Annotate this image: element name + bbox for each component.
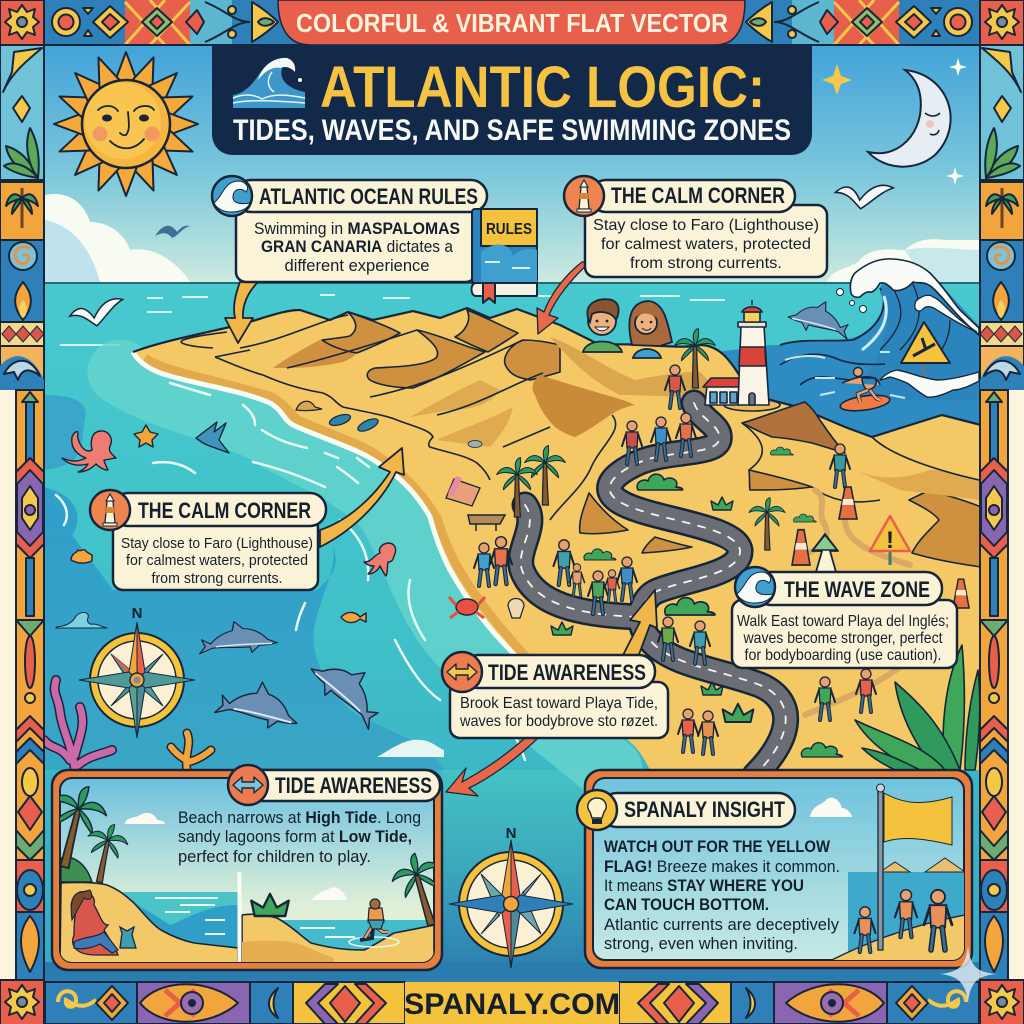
clouds: [45, 194, 981, 282]
dolphins: [200, 622, 394, 738]
title block: [212, 45, 812, 155]
icon: rules book: [472, 209, 537, 303]
title block: ATLANTIC LOGIC:: [320, 55, 765, 120]
callout: the calm corner (left): [90, 490, 326, 590]
cones and caution sign: [792, 487, 969, 608]
arrow: gold to shore from calm corner: [320, 448, 404, 547]
dune ridge lines: [181, 315, 979, 520]
octopus left: [62, 431, 116, 472]
coral: [44, 680, 211, 770]
land: sand dunes: [133, 308, 981, 770]
panel: tide awareness: perfect for children to play.: [178, 847, 371, 866]
dune shadows: [273, 310, 981, 567]
callout: atlantic ocean rules: GRAN CANARIA dictates a: [261, 237, 453, 256]
cones and caution sign: !: [886, 527, 894, 554]
arrow: gold to beach from rules: [225, 282, 258, 343]
panel: spanaly insight: It means STAY WHERE YOU: [604, 876, 804, 895]
callout: atlantic ocean rules: [212, 176, 537, 303]
icon: wave badge: [212, 176, 252, 216]
footer band: [0, 980, 1024, 1024]
icon: wave warning sign: [901, 322, 950, 378]
icons: birds in sky: [69, 179, 893, 328]
panel: spanaly insight: SPANALY INSIGHT: [624, 797, 785, 822]
icon: crescent moon: [822, 58, 967, 185]
panel: spanaly insight: Atlantic currents are deceptively: [604, 915, 839, 934]
panel: spanaly insight: WATCH OUT FOR THE YELLOW: [604, 837, 831, 856]
compass: bottom centre: [449, 825, 573, 968]
panel: tide awareness: TIDE AWARENESS: [275, 773, 432, 798]
callout: the calm corner (left): from strong currents.: [152, 570, 282, 587]
title block: TIDES, WAVES, AND SAFE SWIMMING ZONES: [233, 114, 791, 147]
icon: title wave: [233, 58, 305, 108]
big breaking wave: [780, 259, 981, 400]
top ribbon: COLORFUL & VIBRANT FLAT VECTOR: [296, 8, 728, 38]
callout: the calm corner (top): THE CALM CORNER: [611, 183, 785, 208]
hikers and beachgoers: [474, 365, 876, 754]
panel: tide awareness: [36, 765, 455, 970]
icon: wave badge: [735, 567, 775, 607]
callout: the calm corner (top): from strong currents.: [630, 255, 782, 272]
callout: the calm corner (left): Stay close to Faro (Lighthouse): [121, 535, 313, 552]
icon: tide arrows badge: [442, 652, 482, 692]
icon: rules book: RULES: [486, 221, 532, 238]
flag scene: [810, 784, 968, 965]
callout: tide awareness (centre): TIDE AWARENESS: [488, 660, 646, 685]
callout: atlantic ocean rules: Swimming in MASPALOMAS: [254, 219, 460, 238]
callout: tide awareness (centre): waves for bodybrove sto røzet.: [459, 713, 658, 730]
panel: spanaly insight: strong, even when inviting.: [604, 934, 798, 953]
compass: left: N: [132, 605, 142, 622]
dune top outline: [133, 308, 981, 437]
coast foam: [133, 352, 620, 735]
callout: atlantic ocean rules: different experience: [284, 256, 430, 275]
lighthouse: [703, 300, 780, 411]
road: [521, 403, 910, 775]
callout: the wave zone: waves become stronger, perfect: [743, 630, 943, 647]
shoreline shallows and foam: [56, 372, 610, 770]
wet sand edge: [145, 358, 628, 732]
compass: left: [79, 605, 195, 738]
icon: lighthouse badge: [564, 176, 604, 216]
compass: bottom centre: N: [506, 825, 516, 842]
low wave foam: [880, 370, 979, 397]
white foam wave: [377, 740, 444, 757]
top ribbon: [278, 0, 745, 45]
callout: the wave zone: for bodyboarding (use caution).: [744, 647, 942, 664]
arrow: gold from tide awareness to road: [622, 590, 657, 657]
callout: the calm corner (top): for calmest waters, protected: [601, 236, 811, 253]
deep water by the waves: [715, 262, 981, 437]
dolphin near lighthouse: [786, 296, 853, 339]
callout: the wave zone: Walk East toward Playa del Inglés;: [737, 613, 949, 630]
deep water left: [44, 395, 981, 982]
icon: lighthouse badge: [90, 490, 130, 530]
surfer: [839, 368, 891, 413]
big plant leaves: [855, 645, 980, 770]
callout: the wave zone: [732, 567, 957, 668]
arrow: red down from tide awareness: [446, 738, 538, 796]
family at dunes: [583, 299, 672, 358]
panel: spanaly insight: CAN TOUCH BOTTOM.: [604, 895, 769, 914]
panel: tide awareness: sandy lagoons form at Low Tide,: [178, 827, 412, 846]
border: top band: [0, 0, 1024, 45]
arrow: red to dunes: [537, 262, 590, 334]
icon: sun: [54, 52, 198, 196]
callout: the calm corner (top): [564, 176, 827, 277]
beach items: towel, bench, flip-flops, rock, crab: [296, 401, 524, 618]
arrow: green up from wave zone: [812, 534, 838, 572]
callout: tide awareness (centre): Brook East toward Playa Tide,: [460, 695, 658, 712]
small wave left: [56, 612, 107, 628]
beach scenes: high tide and low tide: [60, 786, 434, 962]
callout: the calm corner (left): THE CALM CORNER: [138, 498, 311, 523]
small octopus: [364, 543, 396, 576]
footer band: SPANALY.COM: [404, 988, 620, 1021]
icon: tide arrows badge: [228, 765, 268, 805]
palm trees: [497, 328, 785, 550]
callout: the calm corner (top): Stay close to Faro (Lighthouse): [593, 217, 819, 234]
sparkle watermark: [940, 945, 996, 1003]
panel: spanaly insight: [577, 770, 972, 968]
panel: tide awareness: Beach narrows at High Tide. Long: [178, 808, 421, 827]
icon: lightbulb badge: [577, 790, 617, 830]
sea life: [56, 422, 444, 757]
bushes and tufts: [551, 447, 842, 757]
callout: the wave zone: THE WAVE ZONE: [784, 577, 930, 602]
panel: spanaly insight: FLAG! Breeze makes it common.: [604, 857, 840, 876]
callout: atlantic ocean rules: ATLANTIC OCEAN RULES: [259, 184, 478, 209]
callout: the calm corner (left): for calmest waters, protected: [126, 552, 308, 569]
callout: tide awareness (centre): [442, 652, 668, 738]
